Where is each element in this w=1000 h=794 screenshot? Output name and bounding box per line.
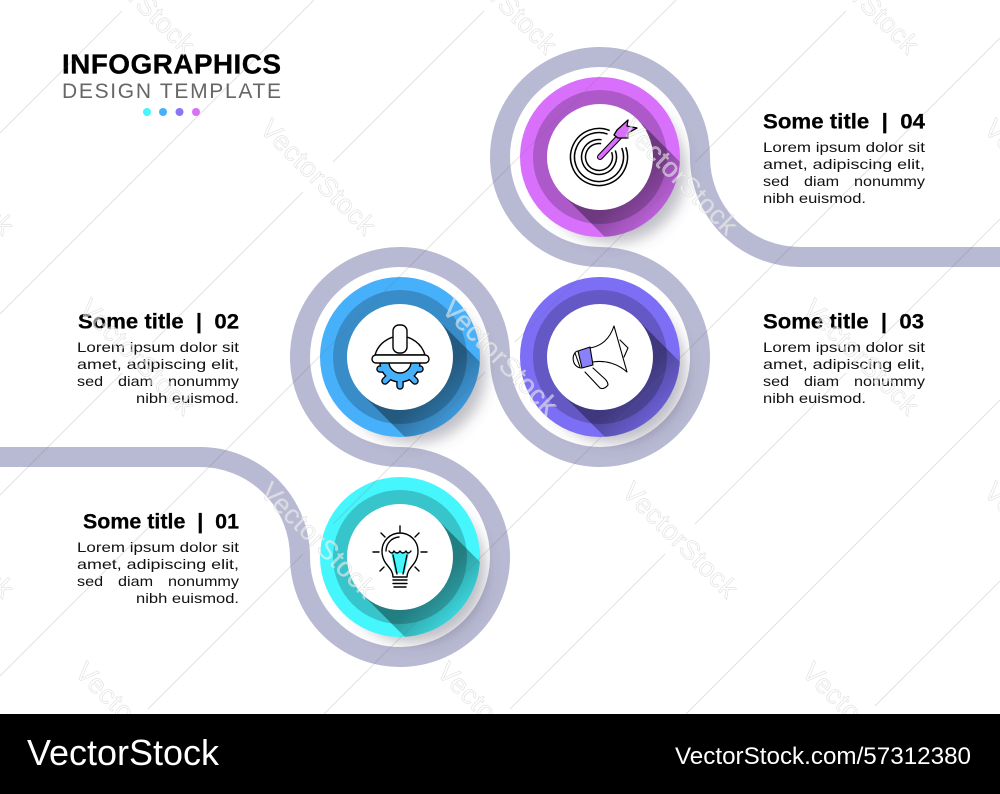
body 02: sed diam nonummy bbox=[77, 373, 239, 389]
icon: helmet and gear bbox=[372, 325, 429, 386]
watermark text: VectorStock bbox=[436, 293, 564, 421]
long shadow 01 bbox=[362, 520, 480, 637]
panel: step 04 circle bbox=[520, 77, 692, 250]
body 01: amet, adipiscing elit, bbox=[77, 556, 239, 572]
footer url: VectorStock.com/57312380 bbox=[675, 743, 971, 770]
title 02: Some title | 02 bbox=[78, 310, 239, 334]
title 04: Some title | 04 bbox=[763, 110, 925, 134]
body 02 bbox=[77, 339, 239, 406]
watermark text: VectorStock bbox=[69, 656, 197, 784]
text block 01 bbox=[77, 510, 239, 606]
drop shadow 02 bbox=[342, 299, 486, 443]
title 03: Some title | 03 bbox=[763, 310, 924, 334]
body 04: nibh euismod. bbox=[763, 190, 866, 206]
text block 02 bbox=[77, 310, 239, 406]
body 04: amet, adipiscing elit, bbox=[763, 156, 925, 172]
dark ring 01 bbox=[333, 490, 467, 624]
dark ring 04 bbox=[533, 90, 667, 224]
watermark text: VectorStock bbox=[73, 293, 201, 421]
long shadow 02 bbox=[362, 320, 480, 437]
body 01 bbox=[77, 539, 239, 606]
dark ring 03 bbox=[533, 290, 667, 424]
drop shadow 01 bbox=[342, 499, 486, 643]
footer logo: VectorStock bbox=[27, 732, 220, 773]
drop shadow 04 bbox=[542, 99, 686, 243]
panel: step 02 circle bbox=[320, 277, 492, 450]
body 01: sed diam nonummy bbox=[77, 573, 239, 589]
ring 01 bbox=[320, 477, 480, 637]
white disc 04 bbox=[547, 104, 653, 210]
heading block bbox=[62, 48, 281, 116]
title 01: Some title | 01 bbox=[83, 510, 239, 534]
panel: step 01 circle bbox=[320, 477, 491, 648]
body 01: nibh euismod. bbox=[136, 590, 239, 606]
body 03: nibh euismod. bbox=[763, 390, 866, 406]
long shadow 04 bbox=[562, 120, 680, 237]
body 04: Lorem ipsum dolor sit bbox=[763, 139, 925, 155]
ring 03 bbox=[520, 277, 680, 437]
body 04: sed diam nonummy bbox=[763, 173, 925, 189]
footer bar bbox=[0, 714, 1000, 794]
white disc 03 bbox=[547, 304, 653, 410]
icon: light bulb bbox=[373, 526, 427, 587]
colour dots bbox=[143, 108, 200, 116]
ring 04 bbox=[520, 77, 680, 237]
watermark text: VectorStock bbox=[254, 476, 382, 604]
body 03: Lorem ipsum dolor sit bbox=[763, 339, 925, 355]
watermark text: VectorStock bbox=[616, 113, 744, 241]
white disc 01 bbox=[347, 504, 453, 610]
ring 02 bbox=[320, 277, 480, 437]
subtitle: DESIGN TEMPLATE bbox=[62, 80, 281, 103]
text block 03 bbox=[763, 310, 925, 406]
dark ring 02 bbox=[333, 290, 467, 424]
text block 04 bbox=[763, 110, 925, 206]
winding track bbox=[0, 57, 1000, 657]
body 03: sed diam nonummy bbox=[763, 373, 925, 389]
body 02: Lorem ipsum dolor sit bbox=[77, 339, 239, 355]
icon: megaphone bbox=[573, 326, 628, 389]
watermark text: VectorStock bbox=[616, 476, 744, 604]
title: INFOGRAPHICS bbox=[62, 48, 281, 80]
watermark text: VectorStock bbox=[431, 656, 559, 784]
long shadow 03 bbox=[562, 320, 680, 437]
body 03 bbox=[763, 339, 925, 406]
body 02: nibh euismod. bbox=[136, 390, 239, 406]
icon: target and arrow bbox=[562, 120, 637, 194]
panel: step 03 circle bbox=[520, 277, 691, 448]
watermark text: VectorStock bbox=[254, 113, 382, 241]
watermark text: VectorStock bbox=[796, 656, 924, 784]
white disc 02 bbox=[347, 304, 453, 410]
drop shadow 03 bbox=[542, 299, 686, 443]
body 03: amet, adipiscing elit, bbox=[763, 356, 925, 372]
watermark text: VectorStock bbox=[797, 293, 925, 421]
body 02: amet, adipiscing elit, bbox=[77, 356, 239, 372]
body 01: Lorem ipsum dolor sit bbox=[77, 539, 239, 555]
body 04 bbox=[763, 139, 925, 206]
